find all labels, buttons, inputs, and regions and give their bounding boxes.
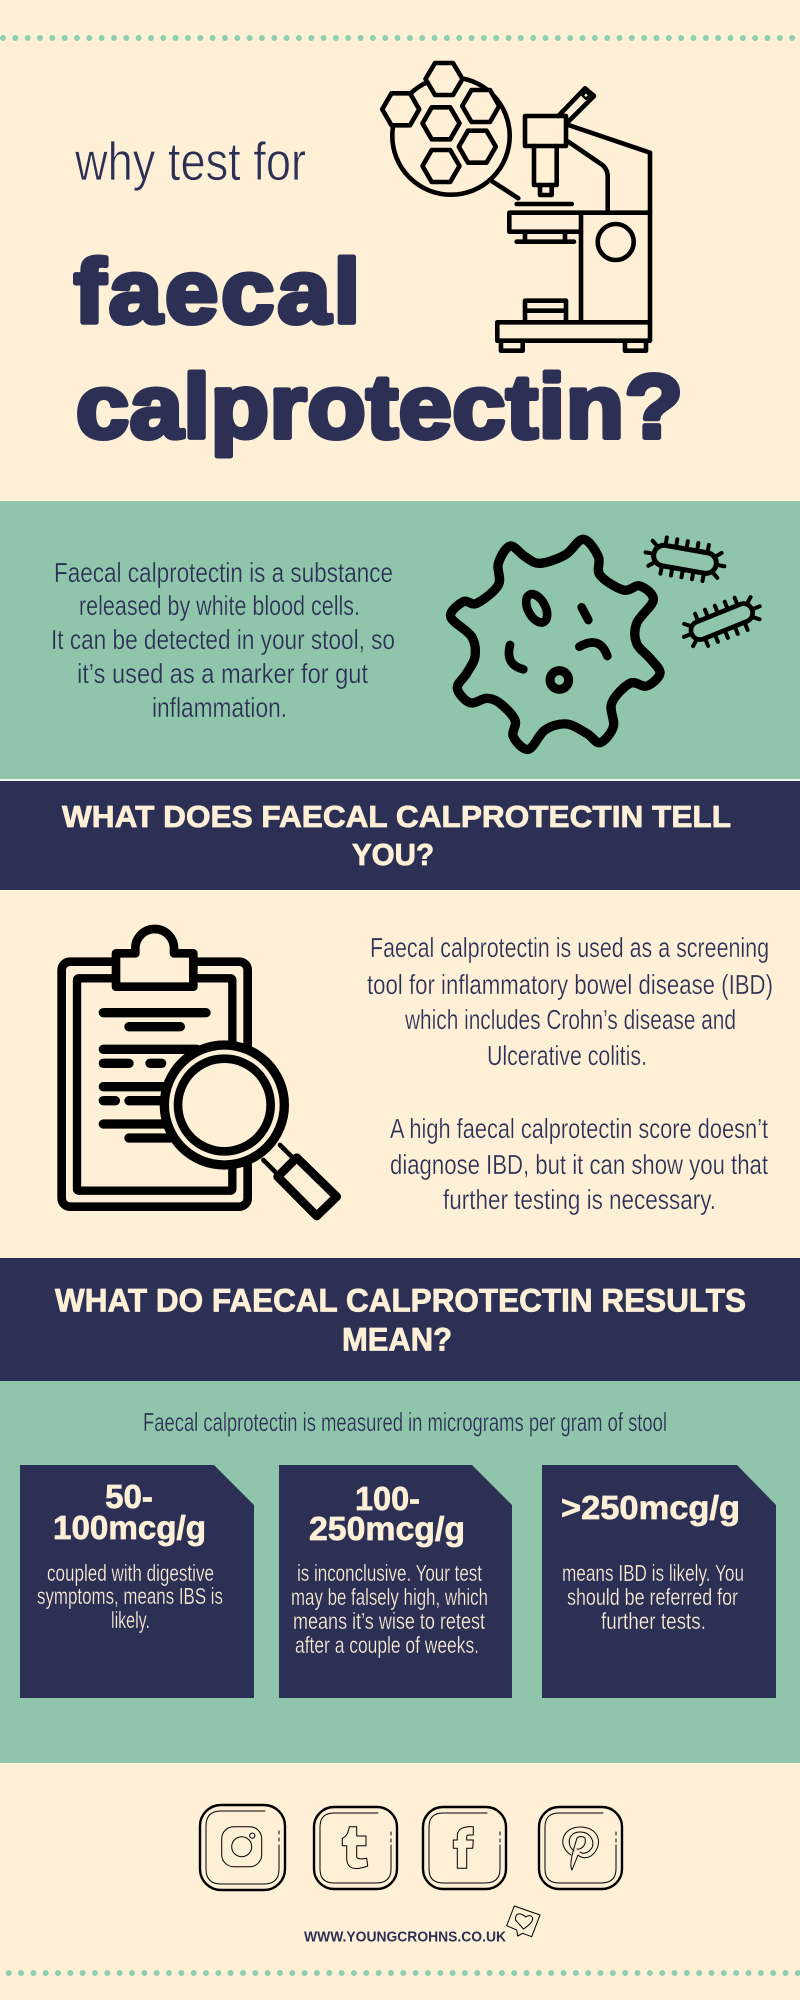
card: 100-250mcg/g: 250mcg/g xyxy=(309,1510,465,1547)
title: calprotectin?: calprotectin? xyxy=(76,356,683,457)
panel: heading what does faecal calprotectin tell you: WHAT DOES FAECAL CALPROTECTIN TELL xyxy=(62,799,731,834)
panel: what is faecal calprotectin xyxy=(0,501,800,779)
subtitle: why test for: why test for xyxy=(74,132,306,192)
card: >250mcg/g xyxy=(542,1465,776,1698)
icon: instagram xyxy=(200,1805,285,1890)
card: 50-100mcg/g: 50- xyxy=(105,1478,153,1515)
panel: results ranges xyxy=(0,1381,800,1763)
card: 50-100mcg/g: 100mcg/g xyxy=(53,1509,206,1546)
icon: tumblr xyxy=(314,1807,397,1889)
panel: hero header xyxy=(0,0,800,501)
text block: definition xyxy=(51,557,395,723)
icon: bacterium bottom xyxy=(677,590,766,653)
text block: high score meaning xyxy=(390,1113,768,1215)
card: 50-100mcg/g: likely. xyxy=(111,1607,150,1633)
panel: heading what do faecal calprotectin results mean: MEAN? xyxy=(342,1322,452,1358)
text block: high score meaning: further testing is necessary. xyxy=(443,1184,716,1215)
card: 50-100mcg/g: coupled with digestive xyxy=(47,1560,214,1586)
card: 50-100mcg/g xyxy=(20,1465,254,1698)
icon: clipboard with magnifying glass xyxy=(62,929,337,1216)
text block: definition: It can be detected in your stool, so xyxy=(51,624,395,655)
card: >250mcg/g: >250mcg/g xyxy=(561,1489,740,1526)
panel: heading what do faecal calprotectin results mean: WHAT DO FAECAL CALPROTECTIN RESULTS xyxy=(55,1282,746,1318)
panel: screening tool explanation xyxy=(0,890,800,1258)
text block: definition: it’s used as a marker for gut xyxy=(77,658,368,689)
panel: heading what does faecal calprotectin tell you xyxy=(0,781,800,890)
icon: pinterest xyxy=(539,1807,622,1889)
panel: footer xyxy=(0,1763,800,2000)
icon: microscope with magnified cells xyxy=(382,63,650,351)
text block: screening tool: Ulcerative colitis. xyxy=(487,1040,647,1071)
text: website url: WWW.YOUNGCROHNS.CO.UK xyxy=(304,1930,507,1946)
card: >250mcg/g: means IBD is likely. You xyxy=(562,1560,744,1586)
card: >250mcg/g: should be referred for xyxy=(567,1584,738,1610)
card: 100-250mcg/g: may be falsely high, which xyxy=(291,1584,488,1610)
card: 100-250mcg/g: 100- xyxy=(355,1480,420,1517)
icon: facebook xyxy=(423,1807,506,1889)
panel: heading what do faecal calprotectin results mean xyxy=(0,1258,800,1381)
icon: germ cell xyxy=(451,539,660,749)
text block: definition: released by white blood cells. xyxy=(79,590,360,621)
panel: heading what does faecal calprotectin tell you: YOU? xyxy=(352,837,434,872)
card: 50-100mcg/g: symptoms, means IBS is xyxy=(37,1583,223,1609)
card: >250mcg/g: further tests. xyxy=(601,1608,706,1634)
card: 100-250mcg/g xyxy=(279,1465,512,1698)
card: 100-250mcg/g: is inconclusive. Your test xyxy=(297,1560,482,1586)
text block: screening tool xyxy=(367,932,773,1071)
icon: heart speech bubble xyxy=(507,1906,540,1937)
text block: definition: inflammation. xyxy=(152,692,287,723)
card: 100-250mcg/g: after a couple of weeks. xyxy=(295,1632,479,1658)
title: faecal: faecal xyxy=(74,241,360,342)
text block: definition: Faecal calprotectin is a substance xyxy=(54,557,393,588)
icon: bacterium top xyxy=(642,534,728,584)
card: 100-250mcg/g: means it’s wise to retest xyxy=(293,1608,485,1634)
